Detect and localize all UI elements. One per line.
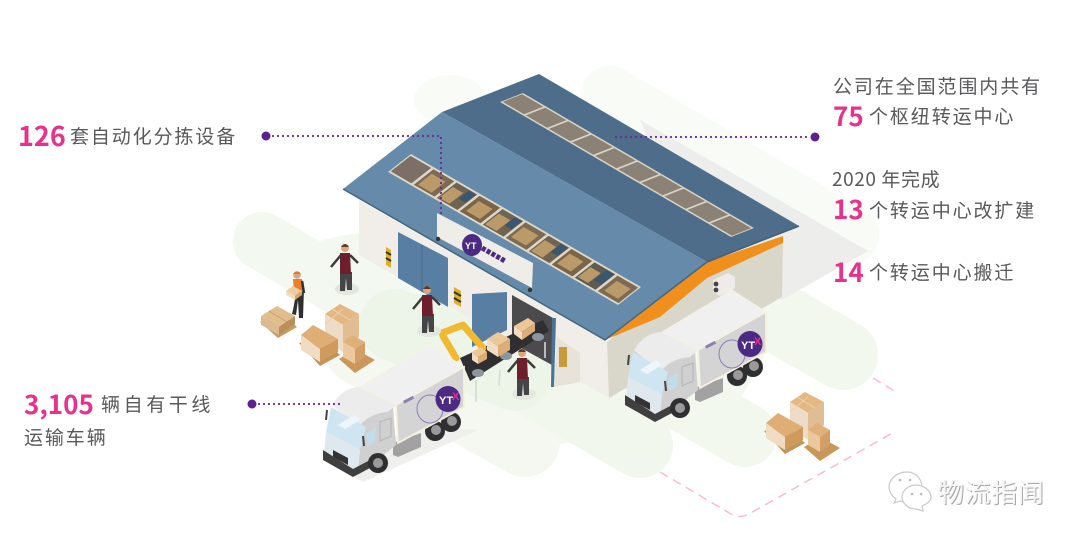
conveyor belt: [460, 320, 549, 381]
robot arm: [442, 325, 483, 358]
stat: 3,105 trucks: 3,105: [24, 385, 94, 422]
stat: 14 hubs relocated: 个转运中心搬迁: [869, 262, 1015, 284]
truck: right: X: [754, 336, 762, 348]
watermark text: 物流指闻: [938, 478, 1044, 508]
worker: maroon shirt, centre: [413, 286, 441, 337]
icon: wechat watermark: [889, 472, 931, 511]
truck: right: [625, 290, 766, 422]
stat: 13 hubs expanded: 个转运中心改扩建: [869, 200, 1036, 222]
stat: 75 hubs: 公司在全国范围内共有: [833, 76, 1042, 98]
hazard marks: [386, 247, 461, 307]
worker: maroon shirt, by conveyor: [508, 349, 536, 400]
loading bay opening: [512, 295, 553, 365]
conveyor and robot arm: [442, 318, 549, 402]
conveyor boxes: [472, 318, 535, 364]
sign board: [436, 213, 533, 292]
orange fascia: [605, 236, 783, 340]
box stack: left: [299, 304, 375, 373]
stat: 75 hubs: 个枢纽转运中心: [869, 106, 1015, 128]
stat: 3,105 trucks: 运输车辆: [24, 427, 108, 449]
sign board: YT: [465, 241, 477, 251]
bay door edge and wall: [551, 318, 580, 387]
ground: green bands: [240, 75, 850, 445]
watermark text: 物流指闻: [939, 479, 1045, 509]
pink dashed zone outline: [660, 378, 896, 516]
roof: right slope: [442, 74, 799, 262]
truck shadow: [335, 425, 478, 482]
roof: left slope: [343, 112, 707, 340]
side wall: [607, 238, 783, 398]
open door: [472, 292, 507, 347]
stat: 13 hubs expanded: 2020 年完成: [832, 165, 940, 192]
skylight: right roof: [500, 93, 754, 237]
stat: 126 sorting equipment: 126: [18, 115, 66, 154]
stat: 14 hubs relocated: 14: [833, 253, 864, 290]
stat: 75 hubs: 75: [833, 97, 864, 134]
air conditioner unit: [713, 273, 735, 296]
small box with pallet: [260, 306, 297, 338]
box stack: right: [764, 392, 840, 461]
worker: maroon shirt, left: [331, 244, 359, 295]
front wall: [359, 200, 609, 398]
stat: 126 sorting equipment: [18, 115, 237, 154]
stat: 14 hubs relocated: [833, 253, 1015, 290]
stat: 75 hubs: [833, 76, 1042, 134]
building shadow: [640, 120, 868, 300]
truck: left: [323, 345, 464, 477]
stat: 126 sorting equipment: 套自动化分拣设备: [70, 126, 237, 148]
leader: hubs: [616, 132, 820, 142]
skylight: left roof: [388, 154, 641, 305]
side door: [398, 232, 448, 307]
stat: 13 hubs expanded: 13: [833, 190, 864, 227]
worker: orange vest carrying box: [286, 271, 304, 318]
warehouse building: [343, 74, 799, 398]
stat: 3,105 trucks: 辆自有干线: [101, 394, 214, 416]
conveyor legs: [476, 342, 545, 402]
truck: right: YT: [741, 340, 755, 352]
stat: 3,105 trucks: [24, 385, 214, 449]
truck: left: X: [452, 391, 460, 403]
conveyor rollers: [472, 333, 544, 377]
truck: left: YT: [439, 395, 453, 407]
leader: sorting equipment: [262, 132, 441, 214]
leader: trucks: [248, 400, 343, 408]
stat: 13 hubs expanded: [832, 165, 1036, 227]
